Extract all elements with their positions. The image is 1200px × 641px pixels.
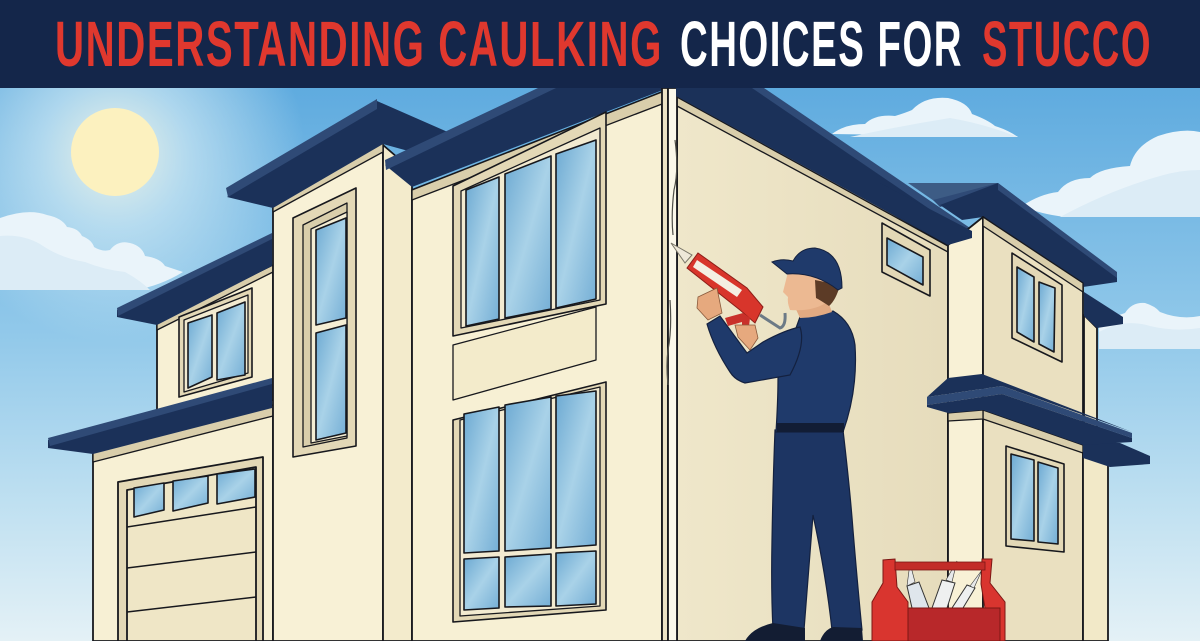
neck: [794, 296, 832, 318]
caulk rod: [760, 313, 785, 328]
garage wall: [93, 410, 273, 641]
right wing back roof: [908, 183, 1117, 287]
worker with caulk gun: [671, 243, 863, 641]
cloud right upper: [1022, 131, 1200, 217]
hands: [697, 288, 758, 350]
right small roof: [1084, 292, 1123, 328]
upper large window: [453, 112, 606, 336]
right lower window: [1006, 446, 1064, 552]
main front wall: [412, 92, 662, 641]
title: CHOICES FOR: [680, 8, 963, 80]
red toolbox: [872, 559, 1005, 641]
lower large window: [453, 382, 606, 622]
right main wall: [677, 92, 948, 641]
tower side strip: [383, 145, 412, 641]
porch wall: [948, 410, 1108, 641]
belt: [777, 423, 844, 432]
legs: [772, 430, 862, 630]
right narrow wall: [1084, 315, 1097, 641]
garage door: [118, 457, 263, 641]
main trim: [412, 92, 662, 200]
wall panel between windows: [453, 307, 596, 400]
sun: [71, 108, 159, 196]
low porch roof: [1083, 442, 1150, 467]
central tower wall: [273, 145, 383, 641]
raised arm: [707, 316, 802, 383]
house: [48, 88, 1150, 641]
title: UNDERSTANDING CAULKING: [55, 8, 663, 80]
head: [783, 272, 830, 310]
right main roof: [676, 88, 973, 245]
crack in wall: [667, 140, 677, 385]
main roof: [385, 88, 668, 187]
cloud top centre: [832, 98, 1018, 137]
corner trim: [662, 88, 677, 641]
title banner: [0, 0, 1200, 88]
hair: [815, 280, 840, 306]
torso: [776, 311, 856, 432]
tower roof: [226, 99, 450, 208]
cloud right lower: [1099, 303, 1200, 349]
left wing window: [179, 288, 252, 397]
caulk gun: [671, 243, 763, 343]
right wing trim: [983, 217, 1083, 292]
right wing lit wall: [948, 217, 983, 641]
cloud left: [0, 212, 183, 290]
boots: [745, 623, 863, 641]
right wing wall: [983, 217, 1083, 641]
tower trim: [273, 142, 383, 212]
small right window: [882, 223, 930, 296]
left upper trim: [157, 265, 273, 330]
left upper roof: [117, 233, 272, 325]
garage trim: [93, 405, 273, 462]
garage roof: [48, 378, 272, 454]
right main trim: [677, 97, 948, 252]
tower window: [293, 188, 356, 457]
cap: [772, 248, 842, 290]
porch roof: [927, 374, 1132, 445]
right upper window: [1012, 253, 1062, 362]
left upper wing wall: [157, 268, 273, 410]
main roof end cap: [880, 183, 972, 245]
tool caulk tubes: [907, 561, 982, 608]
